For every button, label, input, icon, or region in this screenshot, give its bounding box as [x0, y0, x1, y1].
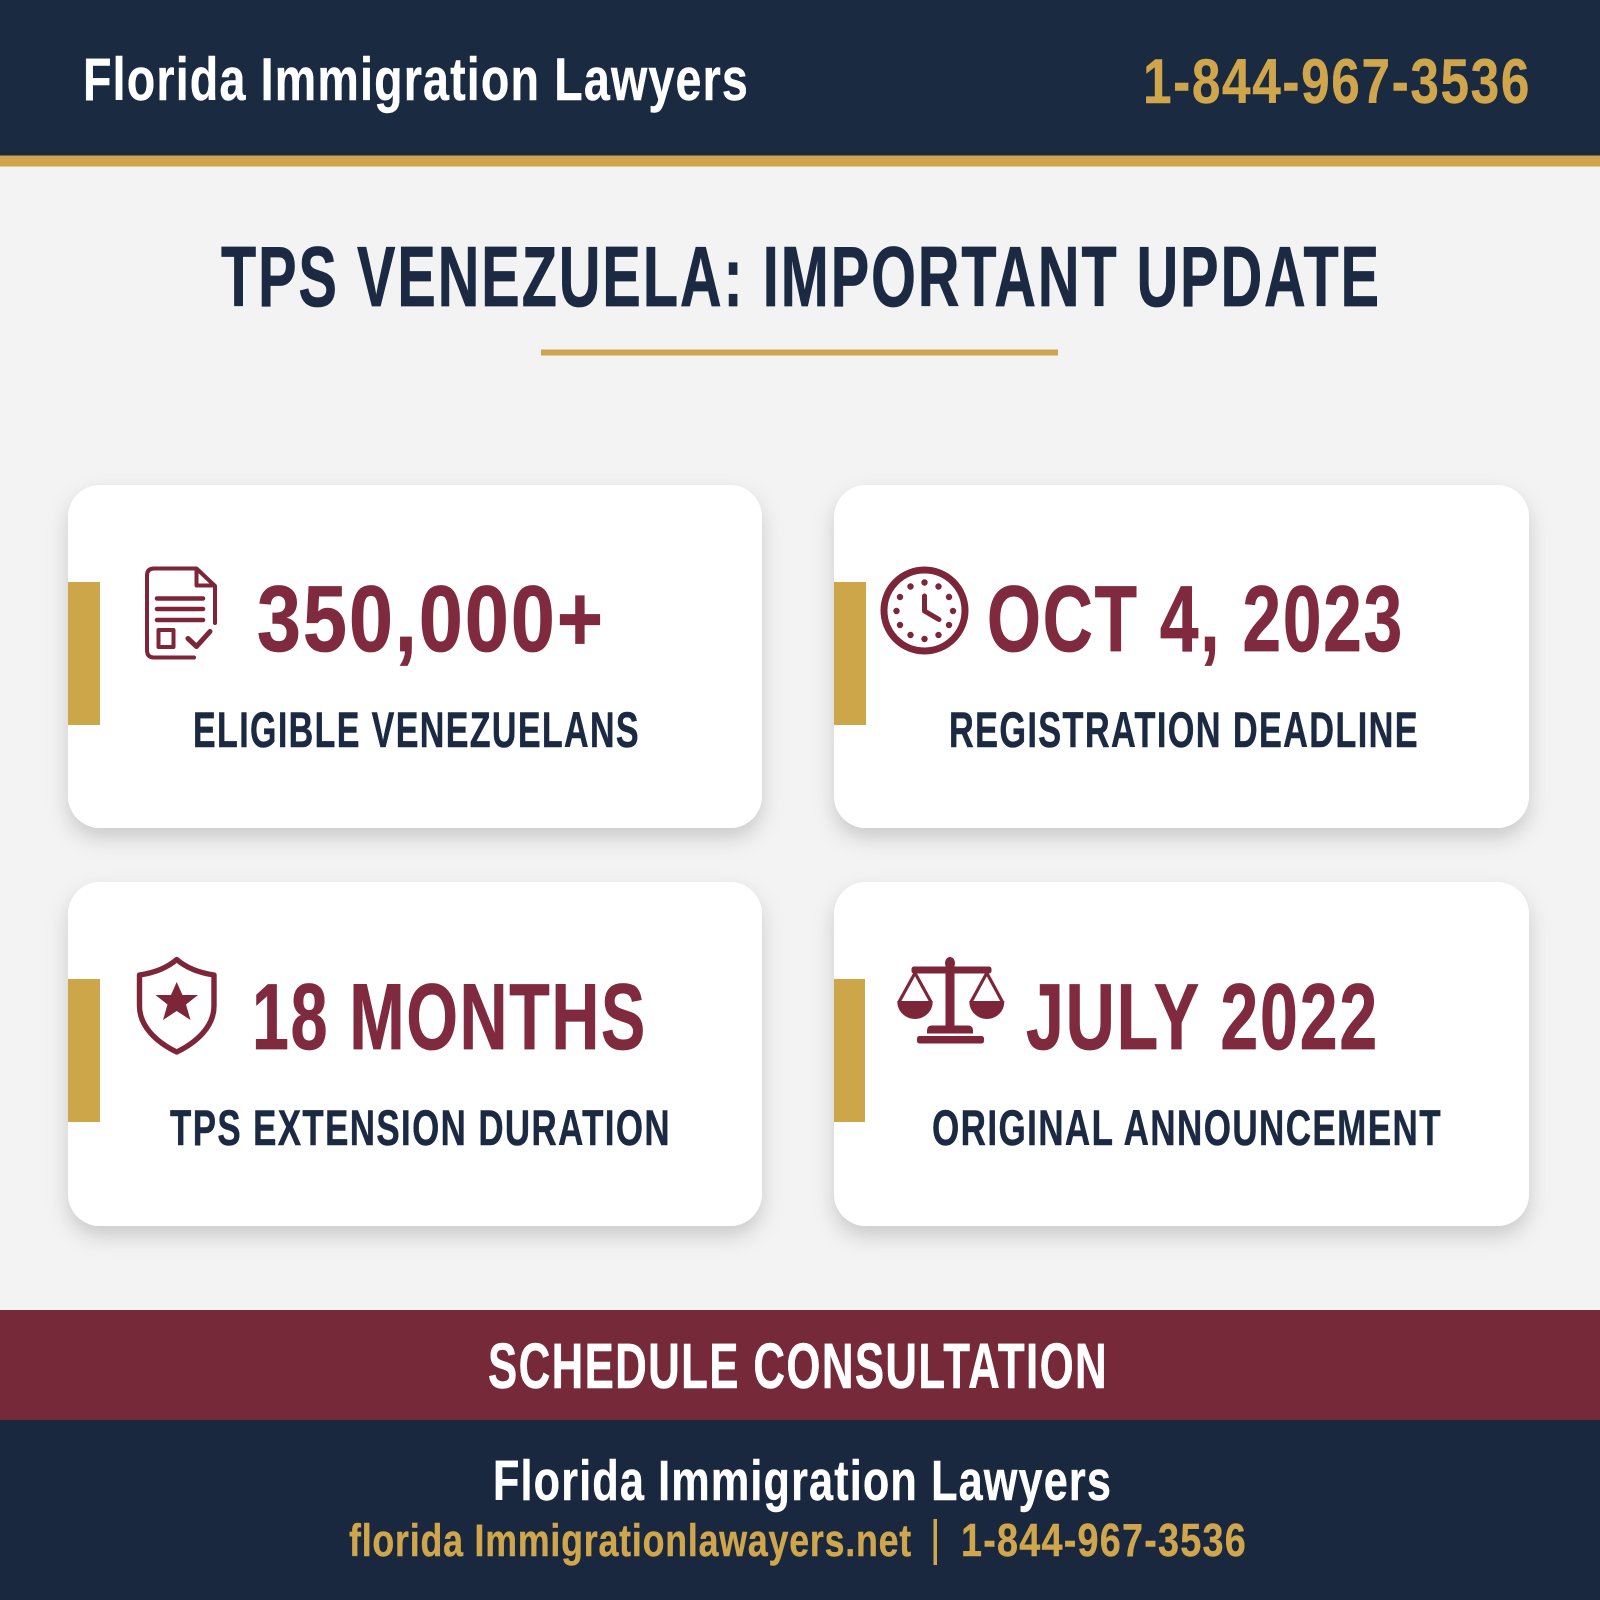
stat value: OCT 4, 2023: [987, 566, 1404, 671]
icon: shield with star: [140, 960, 214, 1052]
panel: registration deadline: [834, 485, 1529, 828]
footer firm name: Florida Immigration Lawyers: [493, 1449, 1112, 1513]
footer: [0, 1420, 1600, 1600]
call to action text: SCHEDULE CONSULTATION: [488, 1330, 1108, 1402]
stat label: TPS EXTENSION DURATION: [170, 1100, 671, 1156]
stat value: 18 MONTHS: [252, 964, 647, 1069]
icon: document with check: [147, 568, 215, 658]
stat label: ELIGIBLE VENEZUELANS: [193, 702, 640, 758]
header bar: [0, 0, 1600, 166]
icon: clock: [884, 570, 965, 651]
stat value: JULY 2022: [1026, 964, 1379, 1069]
footer website: florida Immigrationlawayers.net: [349, 1515, 912, 1566]
icon: scales of justice: [897, 957, 1004, 1044]
panel: extension duration: [68, 882, 762, 1226]
call to action bar: [0, 1310, 1600, 1421]
panel: original announcement: [834, 882, 1529, 1226]
panel: eligible venezuelans: [68, 485, 762, 828]
firm name: Florida Immigration Lawyers: [83, 46, 749, 113]
footer phone number: 1-844-967-3536: [961, 1514, 1247, 1566]
stat value: 350,000+: [257, 566, 605, 671]
